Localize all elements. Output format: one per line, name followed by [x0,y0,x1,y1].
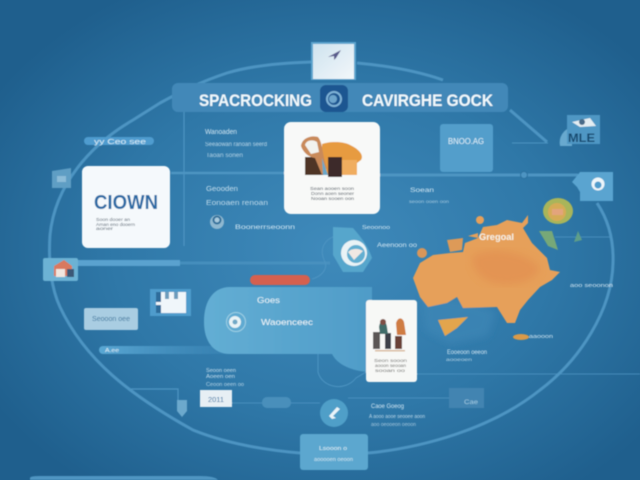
white card: people [366,300,417,382]
text block: upper right: seoon ooen oon [409,199,450,204]
text block: middle left: Boonerrseoonn [235,224,296,231]
text block: center small: Ceoon oeen oo [206,382,244,388]
blue stat card [440,124,493,172]
orange building illustration [301,136,362,177]
main landmass [413,215,560,323]
white card: title: aoner [96,226,114,231]
map [413,198,582,344]
long pill: A.ee [105,348,119,354]
text block: upper left [205,129,267,159]
map side labels: aoo seoonon [570,283,613,289]
caption: Sean aooen soon [310,186,355,191]
map side labels: Seoonoo [362,225,390,231]
top right badge: MLE [568,131,595,145]
text block: upper right [409,187,450,204]
white card: title [82,166,170,248]
text block: upper right: Soean [410,187,434,194]
top right badge [560,115,600,146]
panel icon [226,312,246,332]
dim rounded tag [449,388,484,408]
map label: Gregoal [479,232,514,242]
large panel: Waoenceec [261,318,313,327]
large panel: Goes [257,296,280,305]
caption: Donn aoen seoner [311,191,355,196]
heading left: SPACROCKING [199,91,312,110]
bottom left footer bar [30,476,218,480]
bottom callout: aooooen oeoon [314,457,353,463]
text block: upper left: Taoan sonen [206,153,243,159]
top document icon [311,42,356,80]
year label card: 2011 [208,395,224,404]
text block: bottom center right: Caoe Goeog [371,403,404,410]
small orange islet [513,334,529,340]
text block: center small [206,368,244,388]
left image tile [43,258,78,281]
white card: title: CIOWN [94,192,158,214]
white card: illustration [284,122,380,214]
center round icon [333,227,372,272]
white card: title: Aman eno dooern [96,222,136,227]
heading right: CAVIRGHE GOCK [362,91,494,110]
card caption: Soon dooer an [96,217,131,222]
caption: Nooan sooen oon [311,196,355,201]
people illustration [373,318,406,352]
year label card [200,390,232,407]
text block: middle left [206,184,296,231]
header center icon [320,85,348,112]
green island [539,198,582,250]
round tool icon [320,399,348,427]
bar chart tile [150,289,191,316]
right tab icon [572,172,613,201]
top left pill [84,137,154,146]
map side labels: Aeenoon oo [377,243,418,249]
caption [310,186,355,201]
text block: below map: Eooeoon oeeon [447,350,487,356]
text block: below map [446,350,487,362]
text block: middle left: Geooden [206,184,238,193]
dim rounded tag: Cae [464,399,478,406]
map side labels [362,225,613,340]
shield marker [177,400,187,417]
text block: below map: aooeoen [446,357,473,362]
text block: middle left: Eonoaen renoan [206,198,268,207]
caption [374,358,408,373]
blue stat card: BNOO.AG [448,137,484,146]
top left pill: yy Ceo see [94,139,146,146]
small left tab [52,168,71,188]
text block: center small: Aoeen oen [206,374,235,380]
text block: bottom center right: A aooo aooe seooee aoon [369,414,425,420]
red pill [250,275,310,285]
caption: Seon sooon [374,358,408,363]
bottom callout: Lsooon o [319,446,347,452]
large panel [204,287,372,372]
bottom callout [300,434,368,470]
header bar [172,83,508,112]
long pill [99,346,250,354]
small dim pill [262,397,291,408]
pale label card: Seooon oee [92,316,130,323]
pale label card [84,308,138,330]
text block: bottom center right: aoo oeooeon oeoon [371,422,416,428]
text block: center small: Seoon oeen [206,368,236,374]
island [438,317,468,336]
text block: bottom center right [369,403,425,428]
shallow water [422,298,496,344]
caption: sooan oo [375,368,406,373]
text block: upper left: Wanoaden [205,129,237,136]
connector node [520,172,528,178]
caption: aooon seooan [375,363,407,368]
lens icon [210,215,224,229]
text block: upper left: Seeaowan ranoan seerd [205,142,267,148]
map side labels: aaooon [529,334,553,340]
